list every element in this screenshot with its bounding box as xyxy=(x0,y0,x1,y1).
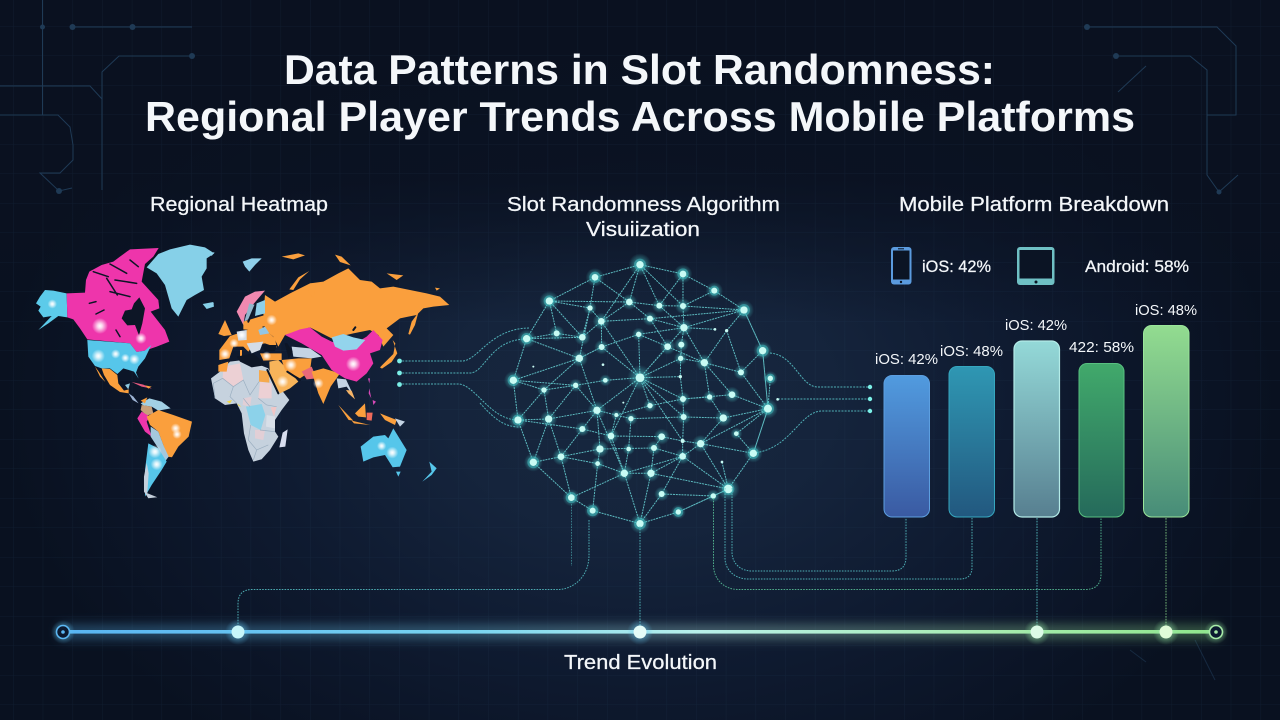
icon: tablet xyxy=(1017,247,1054,285)
bar 3 xyxy=(1005,317,1067,517)
title xyxy=(145,46,1135,140)
network node cores xyxy=(510,261,779,527)
middle east xyxy=(269,360,298,393)
network graph xyxy=(504,253,779,534)
russia xyxy=(263,268,449,347)
legend: Android xyxy=(1017,247,1189,285)
timeline nodes xyxy=(225,619,1179,645)
heading: slot randomness algorithm xyxy=(507,194,780,241)
southeast asia xyxy=(337,378,354,397)
label: trend evolution: Trend Evolution xyxy=(564,652,717,674)
bar 1 xyxy=(875,351,938,517)
title: Data Patterns in Slot Randomness: xyxy=(284,46,995,93)
china xyxy=(285,327,383,382)
connector end dots: map xyxy=(397,359,402,387)
heading: regional heatmap: Regional Heatmap xyxy=(150,194,328,216)
heading: slot randomness algorithm: Visuiization xyxy=(586,219,700,241)
timeline end marker xyxy=(1204,620,1228,644)
timeline xyxy=(51,619,1228,645)
inland seas xyxy=(237,343,293,367)
alaska xyxy=(36,290,67,330)
bar 5: iOS: 48% xyxy=(1135,302,1197,319)
heat spots xyxy=(48,299,398,470)
bar 2: iOS: 48% xyxy=(940,343,1003,360)
timeline start marker xyxy=(51,620,75,644)
network node rims xyxy=(508,259,775,530)
bar 5 xyxy=(1135,302,1197,517)
world heatmap xyxy=(36,245,449,498)
connectors: map to network xyxy=(399,328,530,427)
network node halos xyxy=(504,253,778,534)
south america xyxy=(141,398,171,411)
map: americas and greenland xyxy=(36,245,214,498)
connector end dots: bars xyxy=(868,385,872,413)
central america xyxy=(102,368,129,393)
bar 3: iOS: 42% xyxy=(1005,317,1067,334)
mongolia xyxy=(332,334,365,351)
africa xyxy=(211,360,289,462)
india xyxy=(312,368,340,404)
australia xyxy=(361,428,407,467)
europe xyxy=(237,291,265,325)
title: Regional Player Trends Across Mobile Platforms xyxy=(145,93,1135,140)
bar 1: iOS: 42% xyxy=(875,351,938,368)
heading: mobile platform breakdown: Mobile Platform Breakdown xyxy=(899,194,1169,216)
bar 4: 422: 58% xyxy=(1069,339,1134,356)
greenland xyxy=(147,245,214,317)
connectors: network to bars xyxy=(753,353,870,453)
network edges xyxy=(513,265,770,524)
icon: phone xyxy=(891,247,912,284)
bar 4 xyxy=(1069,339,1134,517)
bar 2 xyxy=(940,343,1003,517)
usa xyxy=(87,340,151,379)
canada xyxy=(67,248,169,352)
legend: Android: Android: 58% xyxy=(1085,258,1189,276)
heading: slot randomness algorithm: Slot Randomness Algorithm xyxy=(507,194,780,216)
bar chart xyxy=(875,302,1197,517)
legend: iOS xyxy=(891,247,991,284)
legend: iOS: iOS: 42% xyxy=(922,258,991,276)
map: europe africa asia oceania xyxy=(210,252,449,482)
vertical connectors to timeline xyxy=(238,488,1166,632)
